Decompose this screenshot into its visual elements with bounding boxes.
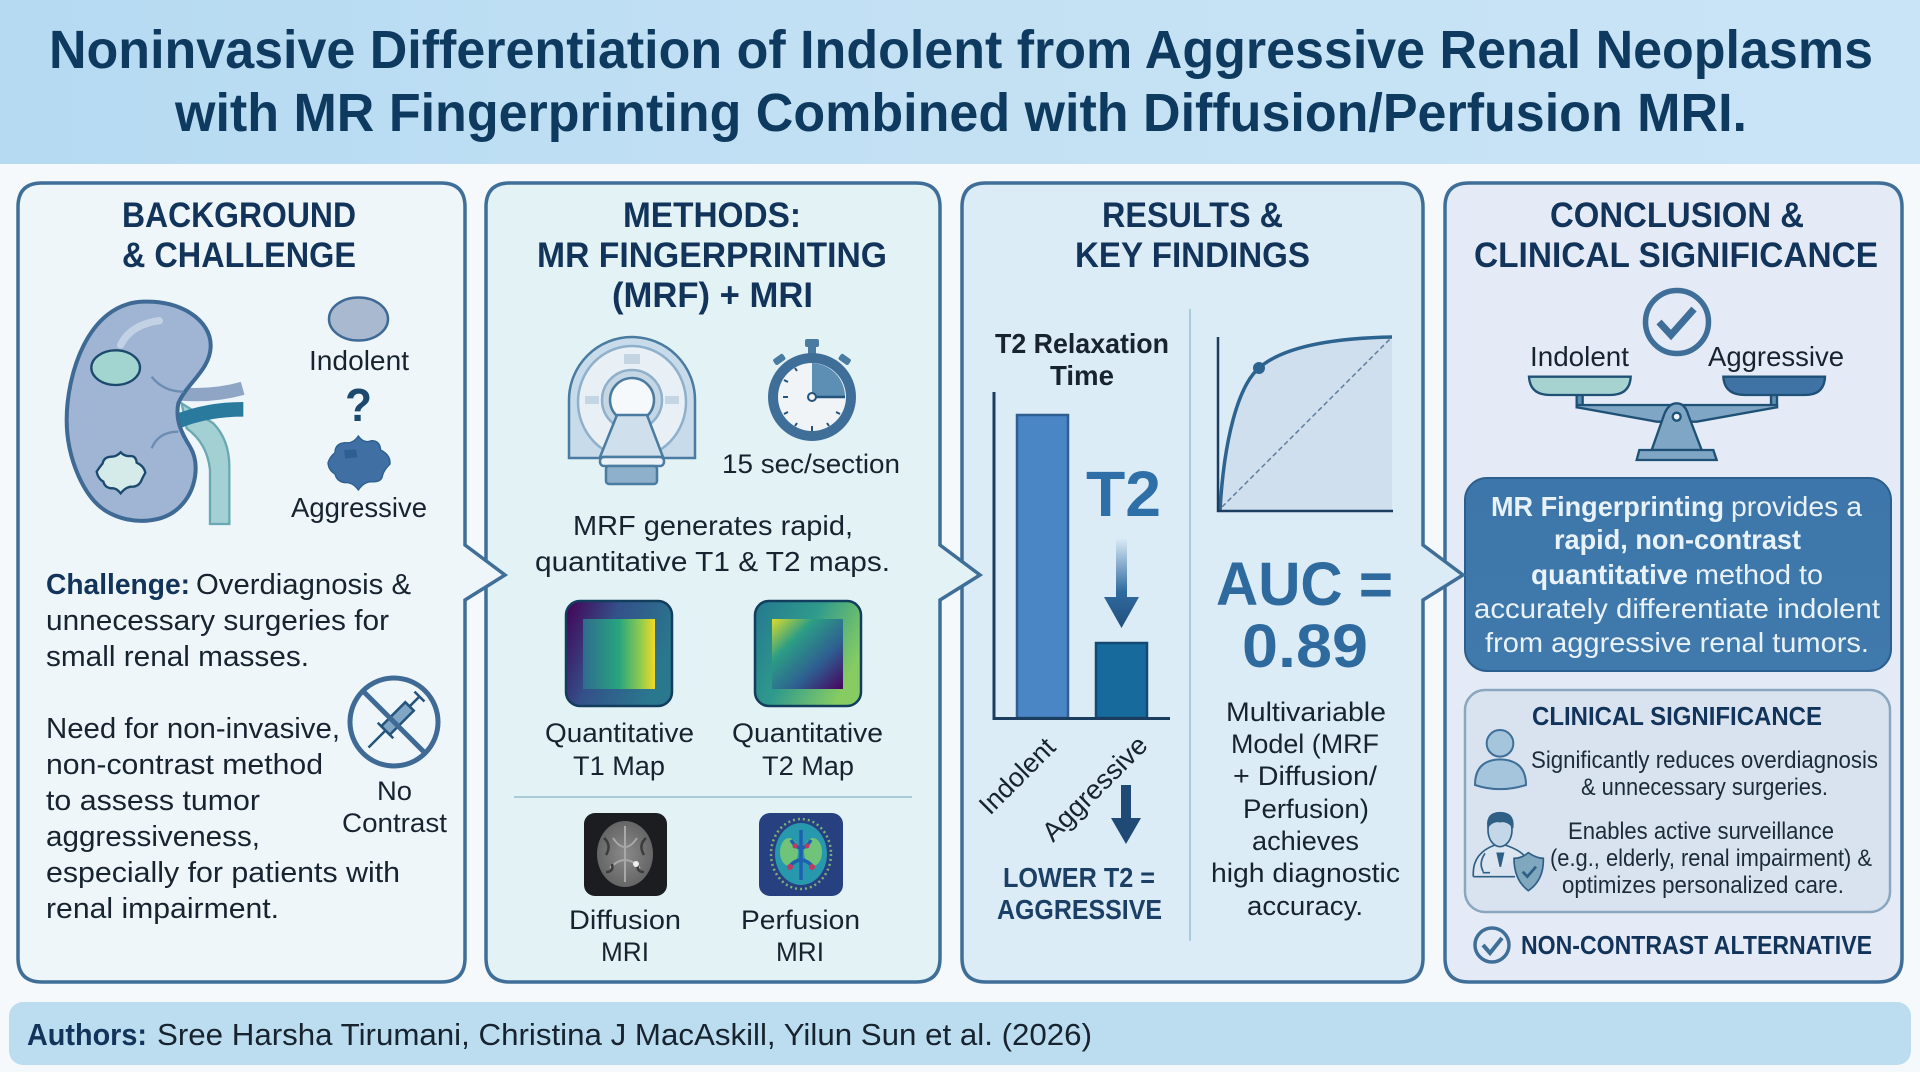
heading: results bbox=[1075, 196, 1310, 275]
text: need: especially for patients with bbox=[46, 857, 400, 889]
bar chart: T2 by tumor type: Indolent bbox=[973, 732, 1062, 820]
heading: conclusion bbox=[1474, 196, 1878, 275]
label: lower T2 = aggressive: AGGRESSIVE bbox=[997, 894, 1162, 925]
image: quantitative T1 map bbox=[566, 601, 672, 706]
panel: results and key findings bbox=[962, 183, 1463, 982]
panel: background and challenge bbox=[18, 183, 505, 982]
heading: conclusion: CONCLUSION & bbox=[1550, 196, 1804, 235]
callout: conclusion statement: accurately differentiate indolent bbox=[1474, 593, 1880, 624]
bar chart: T2 by tumor type: Aggressive bbox=[1036, 730, 1153, 847]
label: indolent: Indolent bbox=[1530, 341, 1629, 372]
image: quantitative T2 map bbox=[755, 601, 861, 706]
label: diffusion MRI bbox=[569, 905, 681, 967]
heading: methods: (MRF) + MRI bbox=[612, 276, 813, 315]
label: T2 map bbox=[732, 718, 883, 781]
text: active surveillance: Enables active surveillance bbox=[1568, 818, 1834, 845]
chart: ROC curve bbox=[1218, 337, 1393, 511]
callout: conclusion statement bbox=[1465, 478, 1891, 671]
text: active surveillance bbox=[1550, 818, 1872, 899]
icon: kidney with tumors bbox=[67, 302, 243, 524]
heading: conclusion: CLINICAL SIGNIFICANCE bbox=[1474, 236, 1878, 275]
label: aggressive: Aggressive bbox=[291, 492, 427, 523]
heading: background: & CHALLENGE bbox=[122, 236, 356, 275]
text: challenge: Challenge: bbox=[46, 569, 190, 601]
text: MRF description: quantitative T1 & T2 maps. bbox=[535, 546, 890, 577]
footer: authors bbox=[9, 1002, 1911, 1065]
image: diffusion MRI brain bbox=[584, 813, 667, 896]
label: diffusion MRI: Diffusion bbox=[569, 905, 681, 935]
text: multivariable model: + Diffusion/ bbox=[1233, 761, 1378, 791]
text: reduces overdiagnosis bbox=[1531, 747, 1878, 801]
label: lower T2 = aggressive: LOWER T2 = bbox=[1003, 862, 1155, 893]
label: perfusion MRI: MRI bbox=[776, 937, 824, 967]
text: multivariable model: accuracy. bbox=[1247, 891, 1363, 921]
text: challenge: unnecessary surgeries for bbox=[46, 605, 389, 637]
icon: stopwatch bbox=[768, 339, 856, 441]
heading: results: RESULTS & bbox=[1102, 196, 1283, 235]
icon: check mark circle bbox=[1646, 290, 1708, 354]
title bbox=[49, 20, 1873, 143]
callout: conclusion statement: quantitative bbox=[1531, 559, 1688, 590]
panel: methods bbox=[486, 183, 980, 982]
label: indolent: Indolent bbox=[309, 345, 409, 376]
clinical significance heading: CLINICAL SIGNIFICANCE bbox=[1532, 701, 1822, 731]
chart title: T2 relaxation time: T2 Relaxation bbox=[995, 328, 1169, 359]
heading: methods: MR FINGERPRINTING bbox=[537, 236, 887, 275]
text: active surveillance: (e.g., elderly, renal impairment) & bbox=[1550, 845, 1872, 872]
icon: balance scale bbox=[1529, 377, 1825, 460]
label: no contrast: Contrast bbox=[342, 808, 448, 838]
statistic: AUC = 0.89: 0.89 bbox=[1242, 612, 1368, 680]
bar chart: T2 by tumor type bbox=[973, 392, 1170, 847]
footer: authors: Authors: bbox=[27, 1017, 147, 1052]
arrow: lower T2 bbox=[1111, 785, 1141, 844]
text: multivariable model bbox=[1211, 697, 1400, 921]
text: multivariable model: Perfusion) bbox=[1243, 794, 1369, 824]
label: no contrast: No bbox=[377, 776, 412, 806]
icon: no contrast syringe bbox=[350, 678, 438, 766]
label: T2: T2 bbox=[1086, 458, 1161, 530]
text: multivariable model: Multivariable bbox=[1226, 697, 1386, 727]
callout: conclusion statement: method to bbox=[1695, 559, 1823, 590]
label: perfusion MRI bbox=[741, 905, 860, 967]
statistic: AUC = 0.89 bbox=[1216, 550, 1393, 680]
heading: background: BACKGROUND bbox=[122, 196, 356, 235]
arrow: T2 decreases bbox=[1104, 538, 1139, 628]
text: active surveillance: optimizes personalized care. bbox=[1562, 872, 1844, 899]
text: challenge: Overdiagnosis & bbox=[196, 569, 411, 601]
chart title: T2 relaxation time: Time bbox=[1050, 360, 1114, 391]
text: need bbox=[46, 713, 400, 925]
callout: conclusion statement: MR Fingerprinting bbox=[1491, 491, 1724, 522]
text: need: to assess tumor bbox=[46, 785, 260, 817]
chart title: T2 relaxation time bbox=[995, 328, 1169, 391]
text: multivariable model: high diagnostic bbox=[1211, 858, 1400, 888]
text: reduces overdiagnosis: Significantly reduces overdiagnosis bbox=[1531, 747, 1878, 774]
image: perfusion MRI brain bbox=[759, 813, 843, 896]
text: need: non-contrast method bbox=[46, 749, 323, 781]
text: MRF description bbox=[535, 510, 890, 577]
panel: clinical significance box bbox=[1465, 690, 1890, 912]
panel: conclusion and clinical significance bbox=[1445, 183, 1902, 982]
heading: results: KEY FINDINGS bbox=[1075, 236, 1310, 275]
label: diffusion MRI: MRI bbox=[601, 937, 649, 967]
label: T2 map: T2 Map bbox=[762, 751, 854, 781]
text: reduces overdiagnosis: & unnecessary surgeries. bbox=[1581, 774, 1828, 801]
text: multivariable model: Model (MRF bbox=[1231, 729, 1379, 759]
label: T1 map bbox=[545, 718, 694, 781]
icon: patient bbox=[1475, 730, 1526, 789]
icon: MRI scanner bbox=[569, 337, 695, 484]
text: need: renal impairment. bbox=[46, 893, 279, 925]
callout: conclusion statement: from aggressive renal tumors. bbox=[1485, 627, 1869, 658]
label: question mark: ? bbox=[345, 379, 372, 431]
heading: methods bbox=[537, 196, 887, 315]
title: Noninvasive Differentiation of Indolent from Aggressive Renal Neoplasms bbox=[49, 20, 1873, 80]
icon: small check circle bbox=[1475, 928, 1509, 962]
label: scan time: 15 sec/section bbox=[722, 449, 900, 479]
text: need: aggressiveness, bbox=[46, 821, 260, 853]
label: T1 map: T1 Map bbox=[573, 751, 665, 781]
label: non-contrast alternative: NON-CONTRAST ALTERNATIVE bbox=[1521, 930, 1872, 960]
label: no contrast bbox=[342, 776, 448, 838]
label: T2 map: Quantitative bbox=[732, 718, 883, 748]
label: aggressive: Aggressive bbox=[1708, 341, 1844, 372]
heading: methods: METHODS: bbox=[623, 196, 801, 235]
label: perfusion MRI: Perfusion bbox=[741, 905, 860, 935]
title: with MR Fingerprinting Combined with Diffusion/Perfusion MRI. bbox=[174, 83, 1747, 143]
footer: authors: Sree Harsha Tirumani, Christina J MacAskill, Yilun Sun et al. (2026) bbox=[157, 1017, 1092, 1052]
header band bbox=[0, 0, 1920, 164]
callout: conclusion statement: provides a bbox=[1731, 491, 1862, 522]
statistic: AUC = 0.89: AUC = bbox=[1216, 550, 1393, 618]
label: T1 map: Quantitative bbox=[545, 718, 694, 748]
text: challenge: small renal masses. bbox=[46, 641, 309, 673]
callout: conclusion statement: rapid, non-contrast bbox=[1554, 524, 1801, 555]
text: challenge bbox=[46, 569, 411, 673]
heading: background bbox=[122, 196, 356, 275]
text: multivariable model: achieves bbox=[1252, 826, 1359, 856]
icon: indolent tumor bbox=[329, 298, 388, 340]
text: MRF description: MRF generates rapid, bbox=[573, 510, 853, 541]
text: need: Need for non-invasive, bbox=[46, 713, 340, 745]
label: lower T2 = aggressive bbox=[997, 862, 1162, 925]
icon: aggressive tumor bbox=[328, 436, 390, 490]
icon: doctor with shield bbox=[1473, 813, 1543, 891]
